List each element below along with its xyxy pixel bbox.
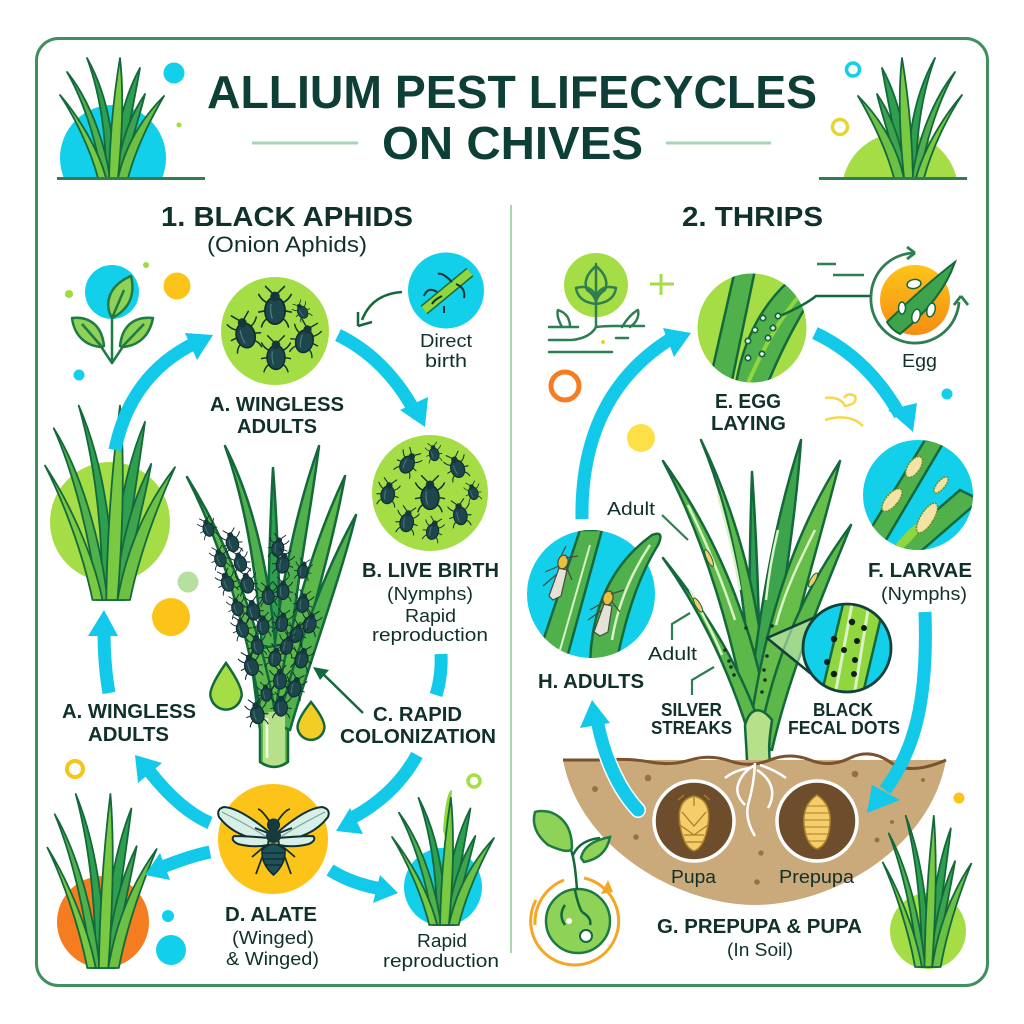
panel: black aphids lifecycle bbox=[45, 252, 499, 971]
label: wingless adults lower: A. WINGLESS bbox=[62, 701, 196, 723]
icon: sprout on ground bbox=[549, 253, 674, 400]
label: egg laying: LAYING bbox=[711, 413, 786, 435]
heading: thrips: 2. THRIPS bbox=[682, 201, 823, 232]
stage circle: live birth bbox=[372, 435, 488, 551]
arrow: pupa to adults bbox=[580, 700, 638, 810]
label: silver streaks bbox=[651, 700, 732, 738]
label: wingless adults lower bbox=[62, 701, 196, 746]
label: egg laying bbox=[711, 391, 786, 435]
label: prepupa: Prepupa bbox=[779, 867, 855, 887]
icon: chive tuft on orange circle bbox=[47, 761, 186, 968]
label: prepupa and pupa: (In Soil) bbox=[727, 940, 793, 960]
arrow: egg laying to larvae bbox=[815, 333, 917, 432]
title: ON CHIVES bbox=[382, 117, 643, 169]
label: rapid colonization: COLONIZATION bbox=[340, 726, 496, 748]
label: pupa: Pupa bbox=[671, 867, 717, 887]
label: black fecal dots: BLACK bbox=[813, 700, 873, 720]
icon: chive tuft on cyan circle bbox=[392, 775, 494, 926]
arrow: direct birth to adults bbox=[358, 292, 402, 326]
label: larvae bbox=[868, 560, 972, 604]
icon: top left chive tuft bbox=[57, 57, 205, 180]
stage circle: thrips adults bbox=[527, 530, 660, 670]
icon: honeydew drop left bbox=[210, 663, 242, 710]
heading: black aphids: 1. BLACK APHIDS bbox=[161, 201, 413, 232]
arrow: plant to adults bbox=[115, 333, 213, 450]
label: silver streaks: SILVER bbox=[661, 700, 722, 720]
label: direct birth bbox=[420, 331, 472, 371]
arrow: alate to orange tuft bbox=[145, 852, 210, 880]
label: alate: D. ALATE bbox=[225, 904, 317, 926]
stage circle: prepupa bbox=[777, 781, 857, 861]
pointer: adult leader line lower bbox=[672, 613, 690, 640]
label: live birth: Rapid bbox=[405, 606, 456, 626]
pointer: silver streak leader line bbox=[692, 667, 714, 695]
heading: black aphids: (Onion Aphids) bbox=[207, 232, 367, 257]
arrow: colonization pointer bbox=[313, 667, 363, 713]
label: alate: (Winged) bbox=[232, 928, 314, 948]
icon: seedling in soil ring bbox=[531, 811, 619, 965]
label: rapid colonization bbox=[340, 704, 496, 748]
label: adult upper: Adult bbox=[607, 499, 655, 519]
label: direct birth: birth bbox=[425, 351, 467, 371]
arrow: lower adults to plant bbox=[88, 610, 118, 693]
label: egg laying: E. EGG bbox=[715, 391, 781, 413]
roots bbox=[725, 763, 786, 836]
label: direct birth: Direct bbox=[420, 331, 472, 351]
arrow: alate to rapid reproduction bbox=[330, 870, 398, 903]
label: wingless adults: ADULTS bbox=[237, 416, 317, 438]
label: live birth: B. LIVE BIRTH bbox=[362, 560, 499, 582]
label: rapid reproduction bbox=[383, 931, 499, 971]
pointer: adult leader line upper bbox=[662, 515, 688, 540]
stage circle: pupa bbox=[654, 781, 734, 861]
label: black fecal dots: FECAL DOTS bbox=[788, 718, 900, 738]
label: adults stage: H. ADULTS bbox=[538, 671, 644, 693]
decorative squiggle bbox=[825, 394, 863, 426]
arrow: reproduction down bbox=[436, 654, 441, 695]
illustration: thrips-damaged chive bbox=[663, 440, 851, 763]
label: alate bbox=[225, 904, 319, 969]
label: prepupa and pupa bbox=[657, 916, 862, 960]
arrow: adults to live birth bbox=[338, 335, 428, 427]
icon: egg closeup bbox=[817, 247, 968, 343]
label: live birth: reproduction bbox=[372, 625, 488, 645]
label: prepupa and pupa: G. PREPUPA & PUPA bbox=[657, 916, 862, 938]
label: adult lower: Adult bbox=[648, 644, 697, 664]
icon: chive tuft on green circle bbox=[45, 406, 198, 636]
arrow: adults to egg laying bbox=[582, 328, 691, 519]
label: wingless adults bbox=[210, 394, 344, 438]
title: ALLIUM PEST LIFECYCLES bbox=[207, 66, 817, 118]
connector: egg zoom line bbox=[780, 296, 870, 316]
label: rapid reproduction: reproduction bbox=[383, 951, 499, 971]
label: rapid reproduction: Rapid bbox=[417, 931, 467, 951]
panel: thrips lifecycle bbox=[527, 247, 980, 969]
label: black fecal dots bbox=[788, 700, 900, 738]
arrow: larvae to prepupa bbox=[867, 612, 925, 813]
stage circle: alate winged aphid bbox=[218, 784, 329, 894]
icon: sprout bbox=[65, 262, 190, 380]
stage circle: egg laying bbox=[698, 274, 806, 382]
label: egg: Egg bbox=[902, 351, 937, 371]
icon: top right chive tuft bbox=[819, 57, 967, 180]
callout: black fecal dots bbox=[766, 602, 892, 694]
label: larvae: F. LARVAE bbox=[868, 560, 972, 582]
label: larvae: (Nymphs) bbox=[881, 584, 967, 604]
arrow: alate to wingless bbox=[135, 755, 210, 823]
icon: direct birth bbox=[408, 252, 484, 328]
label: live birth: (Nymphs) bbox=[387, 584, 473, 604]
icon: honeydew drop right bbox=[298, 702, 324, 740]
label: rapid colonization: C. RAPID bbox=[373, 704, 462, 726]
label: alate: & Winged) bbox=[226, 949, 319, 969]
label: silver streaks: STREAKS bbox=[651, 718, 732, 738]
illustration: chive with aphids bbox=[187, 446, 356, 767]
icon: chive tuft bottom right bbox=[883, 792, 971, 969]
soil cross section bbox=[563, 754, 946, 905]
label: wingless adults: A. WINGLESS bbox=[210, 394, 344, 416]
stage circle: larvae bbox=[863, 440, 973, 550]
label: wingless adults lower: ADULTS bbox=[88, 724, 169, 746]
heading: black aphids bbox=[161, 201, 413, 257]
label: live birth bbox=[362, 560, 499, 645]
stage circle: wingless adults bbox=[221, 277, 329, 385]
arrow: colonization to alate bbox=[336, 755, 417, 834]
title bbox=[207, 66, 817, 169]
